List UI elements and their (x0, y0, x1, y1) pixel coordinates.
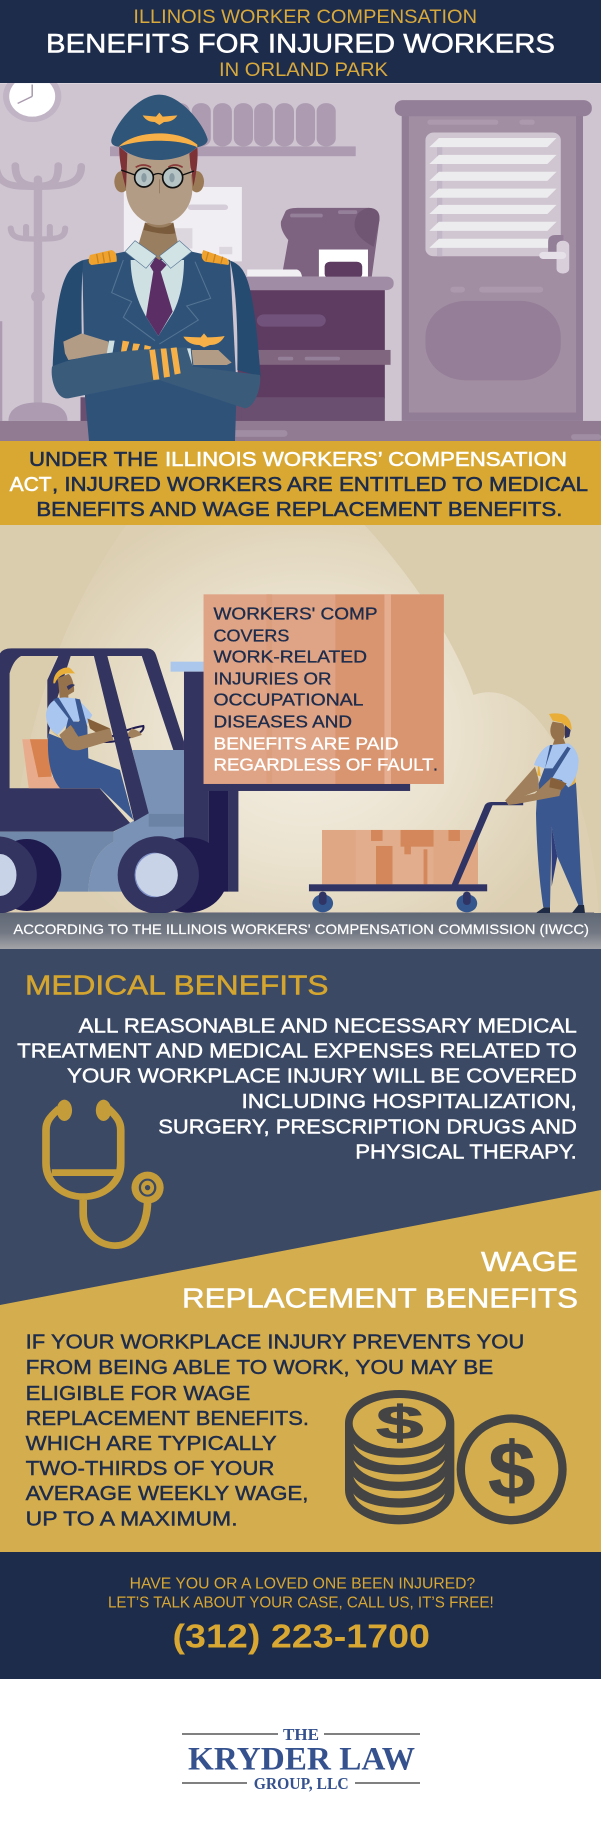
box text: OCCUPATIONAL (214, 690, 364, 710)
intro text: BENEFITS AND WAGE REPLACEMENT BENEFITS. (36, 499, 562, 521)
intro text: ACT (10, 474, 52, 496)
title: BENEFITS FOR INJURED WORKERS (46, 28, 555, 58)
forklift mast and forks (171, 662, 410, 892)
panel: call to action (0, 1552, 601, 1679)
wage replacement text: WHICH ARE TYPICALLY (26, 1433, 277, 1455)
heading: wage replacement benefits: REPLACEMENT BENEFITS (182, 1282, 578, 1313)
logo: the kryder law group: KRYDER LAW (188, 1741, 415, 1777)
call to action text: HAVE YOU OR A LOVED ONE BEEN INJURED? (130, 1575, 475, 1592)
pilot head (114, 147, 204, 225)
wall notice (124, 187, 242, 261)
pilot collar and epaulets (89, 241, 229, 268)
box text: WORK-RELATED (214, 647, 367, 667)
wage replacement text: FROM BEING ABLE TO WORK, YOU MAY BE (26, 1357, 493, 1379)
gray source bar (0, 913, 601, 949)
call to action text: LET’S TALK ABOUT YOUR CASE, CALL US, IT’S FREE! (108, 1594, 494, 1611)
medical benefits text: INCLUDING HOSPITALIZATION, (242, 1091, 577, 1113)
box text: DISEASES AND (214, 711, 352, 731)
illustration: worker with cart (505, 713, 585, 913)
medical benefits text: PHYSICAL THERAPY. (355, 1142, 577, 1164)
reception desk (80, 208, 394, 422)
call to action text (108, 1575, 494, 1611)
forklift seat (22, 739, 100, 788)
icon: wall clock (3, 83, 62, 122)
box text: COVERS (214, 626, 289, 646)
pilot crossed arms (52, 333, 260, 408)
forklift body (0, 750, 184, 892)
medical benefits text: ALL REASONABLE AND NECESSARY MEDICAL (79, 1016, 577, 1038)
heading: wage replacement benefits (182, 1246, 578, 1313)
phone number: (312) 223-1700 (172, 1618, 430, 1655)
source caption: ACCORDING TO THE ILLINOIS WORKERS' COMPENSATION COMMISSION (IWCC) (13, 921, 589, 937)
box text: BENEFITS ARE PAID (214, 733, 398, 753)
icon: stethoscope (46, 1100, 164, 1246)
wage replacement text: ELIGIBLE FOR WAGE (26, 1383, 250, 1405)
illustration: forklift warehouse (0, 520, 601, 915)
wage replacement text: IF YOUR WORKPLACE INJURY PREVENTS YOU (26, 1331, 524, 1353)
logo: the kryder law group: THE (283, 1725, 319, 1744)
pilot cap (111, 95, 208, 160)
icon: coins: $ (376, 1396, 424, 1449)
header eyebrow: ILLINOIS WORKER COMPENSATION (133, 6, 477, 28)
pilot neck (138, 223, 178, 260)
coat rack (0, 166, 81, 421)
heading: medical benefits: MEDICAL BENEFITS (25, 969, 328, 1000)
box text: INJURIES OR (214, 668, 332, 688)
medical benefits text (17, 1016, 577, 1164)
illustration: office scene (0, 71, 601, 442)
medical benefits text: YOUR WORKPLACE INJURY WILL BE COVERED (67, 1066, 577, 1088)
wage replacement text: REPLACEMENT BENEFITS. (26, 1408, 309, 1430)
box text: REGARDLESS OF FAULT (214, 755, 434, 775)
intro text: , INJURED WORKERS ARE ENTITLED TO MEDICAL (52, 474, 588, 496)
wage replacement text: TWO-THIRDS OF YOUR (26, 1458, 274, 1480)
panel: wage replacement benefits (0, 1190, 601, 1552)
intro banner (0, 441, 601, 525)
forklift cab frame (0, 648, 184, 832)
box text: WORKERS' COMP (214, 603, 378, 623)
door (395, 100, 592, 421)
intro text (10, 449, 588, 521)
logo: the kryder law group: GROUP, LLC (254, 1774, 349, 1793)
header banner (0, 0, 601, 83)
forklift pillar (94, 656, 149, 822)
intro text: ILLINOIS WORKERS’ COMPENSATION (165, 449, 567, 471)
logo: the kryder law group (182, 1725, 420, 1793)
illustration: pilot figure (52, 95, 261, 441)
icon: coins: $ (488, 1425, 535, 1514)
cart with boxes (309, 802, 523, 912)
panel: medical benefits (0, 949, 601, 1309)
forklift driver (46, 656, 144, 820)
carried box (204, 594, 444, 784)
floor (0, 421, 601, 442)
wage replacement text: UP TO A MAXIMUM. (26, 1509, 238, 1531)
medical benefits text: TREATMENT AND MEDICAL EXPENSES RELATED TO (17, 1041, 577, 1063)
forklift (0, 648, 410, 914)
bookshelf (110, 103, 356, 156)
intro text: UNDER THE (29, 449, 158, 471)
icon: coins (345, 1390, 567, 1524)
heading: wage replacement benefits: WAGE (481, 1246, 578, 1277)
box text (214, 603, 438, 775)
forklift wheels (0, 836, 228, 914)
header location: IN ORLAND PARK (219, 59, 388, 81)
pilot torso (53, 252, 261, 441)
box text: . (433, 755, 438, 775)
wage replacement text: AVERAGE WEEKLY WAGE, (26, 1483, 308, 1505)
wage replacement text (26, 1331, 524, 1531)
medical benefits text: SURGERY, PRESCRIPTION DRUGS AND (158, 1117, 577, 1139)
